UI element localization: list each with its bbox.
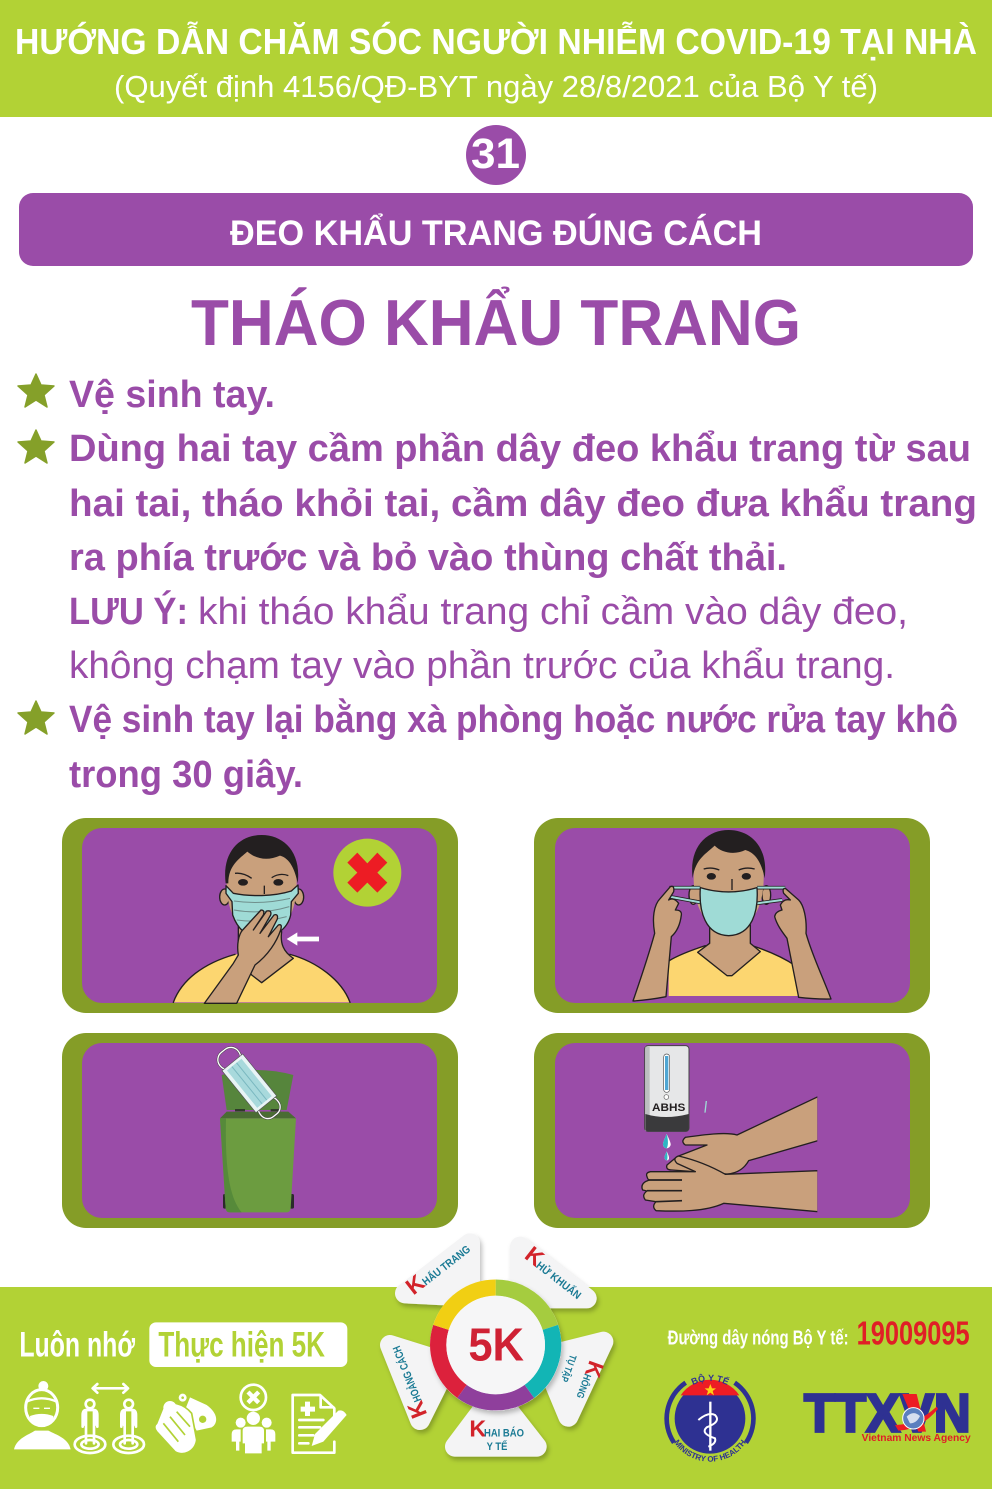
slogan text: Luôn nhớ bbox=[19, 1326, 136, 1365]
panel: remove mask by straps bbox=[534, 818, 930, 1013]
step 3 text: trong 30 giây. bbox=[69, 754, 303, 796]
panel: hand sanitizer bbox=[534, 1033, 930, 1228]
icon: hand washing bbox=[155, 1395, 216, 1454]
caution note: khi tháo khẩu trang chỉ cầm vào dây đeo, bbox=[198, 591, 908, 633]
logo: Ministry of Health bbox=[664, 1374, 756, 1462]
petal: disinfect: K bbox=[520, 1241, 550, 1272]
main heading: THÁO KHẨU TRANG bbox=[191, 286, 801, 359]
hotline bbox=[668, 1316, 970, 1353]
petal: disinfect: HỬ KHUẨN bbox=[534, 1259, 584, 1302]
icon: waste bin bbox=[220, 1070, 296, 1212]
footer band bbox=[0, 1287, 992, 1489]
hotline: Đường dây nóng Bộ Y tế: bbox=[668, 1327, 849, 1349]
petal: health declaration: K bbox=[469, 1416, 486, 1442]
petal: health declaration bbox=[455, 1393, 537, 1453]
instruction text block bbox=[18, 374, 977, 796]
petal: no gathering bbox=[543, 1342, 609, 1417]
petal: distance: K bbox=[401, 1397, 432, 1422]
logo: TTXVN: TTXVN bbox=[804, 1385, 971, 1444]
5K label: 5K bbox=[468, 1318, 524, 1370]
step 2 text bbox=[69, 428, 977, 579]
petal: no gathering: K bbox=[580, 1358, 609, 1381]
petal: mask: K bbox=[400, 1269, 430, 1300]
number badge 31: 31 bbox=[471, 130, 520, 178]
petal: no gathering: HÔNG bbox=[573, 1372, 594, 1401]
number badge 31 bbox=[466, 125, 526, 185]
icon: dispenser bbox=[645, 1046, 689, 1131]
slogan and 5K icons bbox=[14, 1322, 347, 1454]
step 2 text: hai tai, tháo khỏi tai, cầm dây đeo đưa khẩu trang bbox=[69, 483, 977, 525]
logo: Ministry of Health: BỘ Y TẾ bbox=[691, 1374, 730, 1385]
section banner bbox=[19, 193, 973, 266]
step 1 text: Vệ sinh tay. bbox=[69, 374, 275, 416]
petal: distance: HOẢNG CÁCH bbox=[390, 1344, 424, 1404]
ring and center bbox=[438, 1288, 553, 1402]
petal: health declaration: Y TẾ bbox=[487, 1440, 507, 1453]
star bullet 2 bbox=[18, 430, 54, 463]
star bullet 3 bbox=[18, 701, 54, 734]
header subtitle: (Quyết định 4156/QĐ-BYT ngày 28/8/2021 của Bộ Y tế) bbox=[114, 69, 878, 104]
caution note: không chạm tay vào phần trước của khẩu trang. bbox=[69, 645, 895, 687]
icon: no gatherings bbox=[232, 1385, 275, 1453]
star bullet 1 bbox=[18, 374, 54, 407]
petal: no gathering: TỤ TẬP bbox=[558, 1353, 580, 1384]
section banner: ĐEO KHẨU TRANG ĐÚNG CÁCH bbox=[230, 213, 762, 253]
icon: person wearing mask bbox=[14, 1381, 71, 1449]
petal: health declaration: HAI BÁO bbox=[484, 1427, 524, 1440]
slogan text bbox=[19, 1322, 347, 1367]
header band bbox=[0, 0, 992, 117]
step 2 text: ra phía trước và bỏ vào thùng chất thải. bbox=[69, 537, 787, 579]
petal: mask: HẨU TRANG bbox=[420, 1243, 473, 1288]
icon: used mask bbox=[213, 1043, 285, 1124]
icon: keep distance bbox=[75, 1384, 144, 1453]
petal: mask bbox=[400, 1234, 474, 1300]
caution note: LƯU Ý: bbox=[69, 589, 188, 633]
icon: red cross badge bbox=[333, 839, 401, 907]
petal: disinfect bbox=[520, 1241, 590, 1304]
icon: health declaration form bbox=[293, 1395, 347, 1453]
5K wheel bbox=[380, 1234, 609, 1453]
icon: sanitizer drops bbox=[663, 1101, 707, 1160]
panel: do not touch mask front bbox=[62, 818, 458, 1013]
slogan text: Thực hiện 5K bbox=[158, 1326, 325, 1365]
icon: dispenser: ABHS bbox=[652, 1102, 686, 1114]
panel: drop mask in bin bbox=[62, 1033, 458, 1228]
arrow bbox=[287, 932, 319, 946]
icon: washing hands bbox=[642, 1095, 821, 1213]
step 3 text bbox=[69, 697, 958, 796]
petal: distance bbox=[380, 1343, 448, 1422]
logo: Ministry of Health: MINISTRY OF HEALTH bbox=[674, 1440, 746, 1462]
caution note bbox=[69, 589, 908, 687]
step 2 text: Dùng hai tay cầm phần dây đeo khẩu trang từ sau bbox=[69, 428, 971, 470]
logo: TTXVN: Vietnam News Agency bbox=[862, 1433, 971, 1444]
